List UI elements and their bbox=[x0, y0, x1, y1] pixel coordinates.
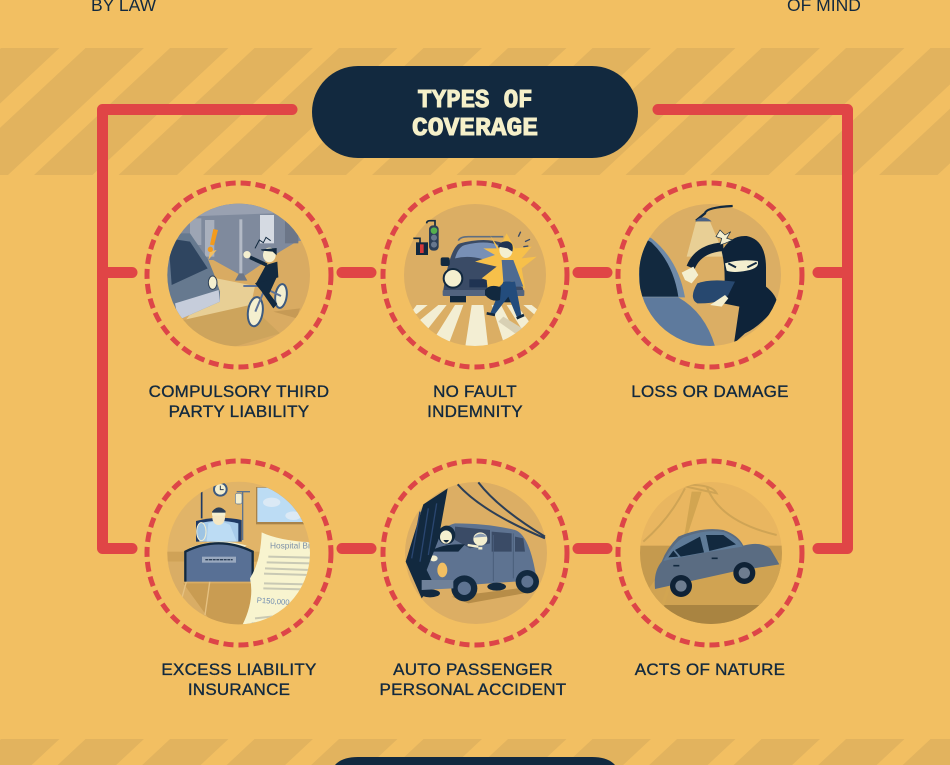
panel: auto passenger personal accident bbox=[380, 461, 567, 699]
title pill bbox=[312, 66, 638, 158]
label: ACTS OF NATURE bbox=[635, 660, 785, 679]
dashed ring bbox=[147, 183, 331, 367]
label: INDEMNITY bbox=[427, 402, 523, 421]
panel: loss or damage bbox=[618, 183, 802, 401]
label: PERSONAL ACCIDENT bbox=[380, 680, 566, 699]
next section pill bbox=[335, 757, 615, 765]
illustration: car crash with passengers bbox=[405, 482, 547, 624]
label: PARTY LIABILITY bbox=[169, 402, 309, 421]
connectors: row stubs bbox=[103, 272, 847, 548]
connector: right bracket bbox=[658, 110, 848, 548]
illustration: pedestrian hit by car bbox=[402, 200, 548, 350]
panel: acts of nature bbox=[618, 461, 802, 679]
illustration: hospital bed and bill: Hospital Bill bbox=[270, 540, 314, 550]
dashed ring bbox=[383, 461, 567, 645]
dashed ring bbox=[383, 183, 567, 367]
illustration: car on flooded ground bbox=[637, 482, 783, 628]
illustration: hospital bed and bill bbox=[167, 482, 314, 628]
panel: compulsory third party liability bbox=[147, 183, 331, 421]
panel: excess liability insurance bbox=[147, 461, 331, 699]
illustration: cyclist and van bbox=[167, 204, 310, 346]
label: INSURANCE bbox=[188, 680, 290, 699]
label: EXCESS LIABILITY bbox=[161, 660, 317, 679]
panel: no fault indemnity bbox=[383, 183, 567, 421]
title text: TYPES OF bbox=[418, 85, 532, 115]
striped band: bottom bbox=[0, 739, 950, 765]
title text: COVERAGE bbox=[412, 113, 538, 143]
dashed ring bbox=[147, 461, 331, 645]
label: LOSS OR DAMAGE bbox=[631, 382, 789, 401]
illustration: hospital bed and bill: P150,000 bbox=[257, 596, 290, 607]
connector: left bracket bbox=[102, 110, 292, 548]
label: COMPULSORY THIRD bbox=[149, 382, 329, 401]
illustration: car thief bbox=[637, 200, 783, 350]
striped band: top bbox=[0, 48, 950, 175]
dashed ring bbox=[618, 183, 802, 367]
label: AUTO PASSENGER bbox=[393, 660, 553, 679]
label: NO FAULT bbox=[433, 382, 517, 401]
dashed ring bbox=[618, 461, 802, 645]
